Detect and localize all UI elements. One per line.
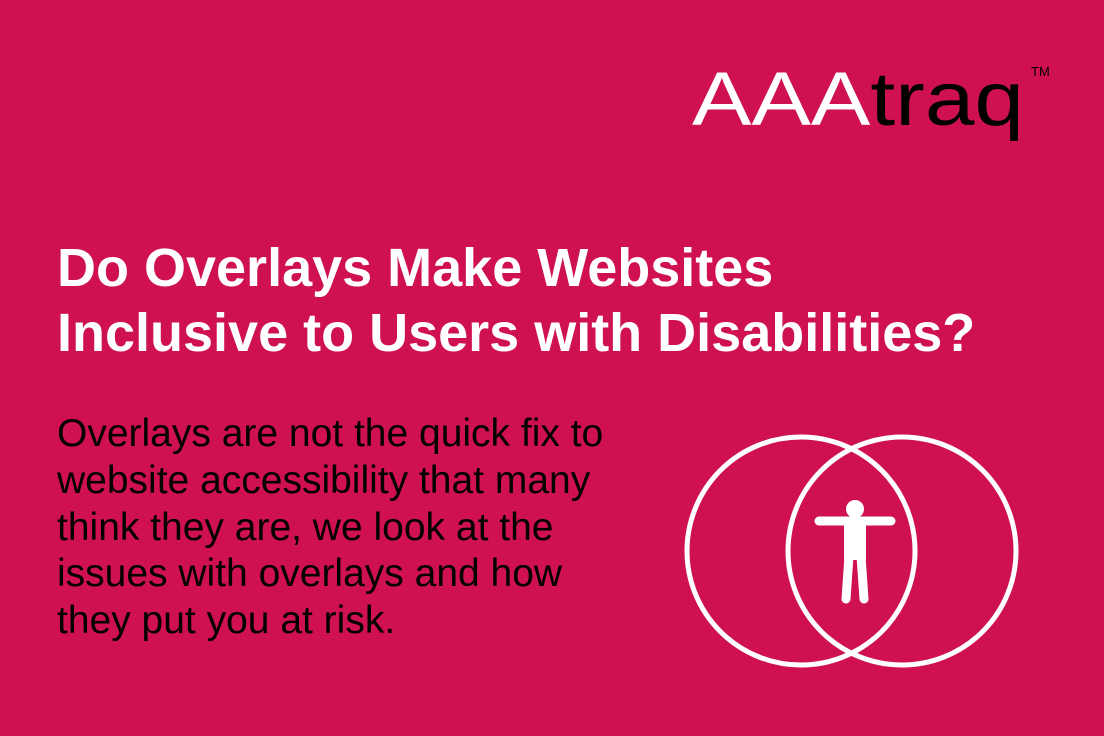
body text: Overlays are not the quick fix to	[57, 412, 603, 455]
title: Do Overlays Make Websites	[57, 238, 773, 298]
body text: they put you at risk.	[57, 599, 395, 642]
title: Inclusive to Users with Disabilities?	[57, 303, 975, 363]
body text: think they are, we look at the	[57, 506, 553, 549]
body text: website accessibility that many	[57, 459, 590, 502]
title	[57, 238, 975, 363]
body text: issues with overlays and how	[57, 552, 562, 595]
logo: AAA traq	[692, 57, 1024, 142]
logo: TM	[1031, 64, 1050, 79]
body text	[57, 412, 603, 642]
